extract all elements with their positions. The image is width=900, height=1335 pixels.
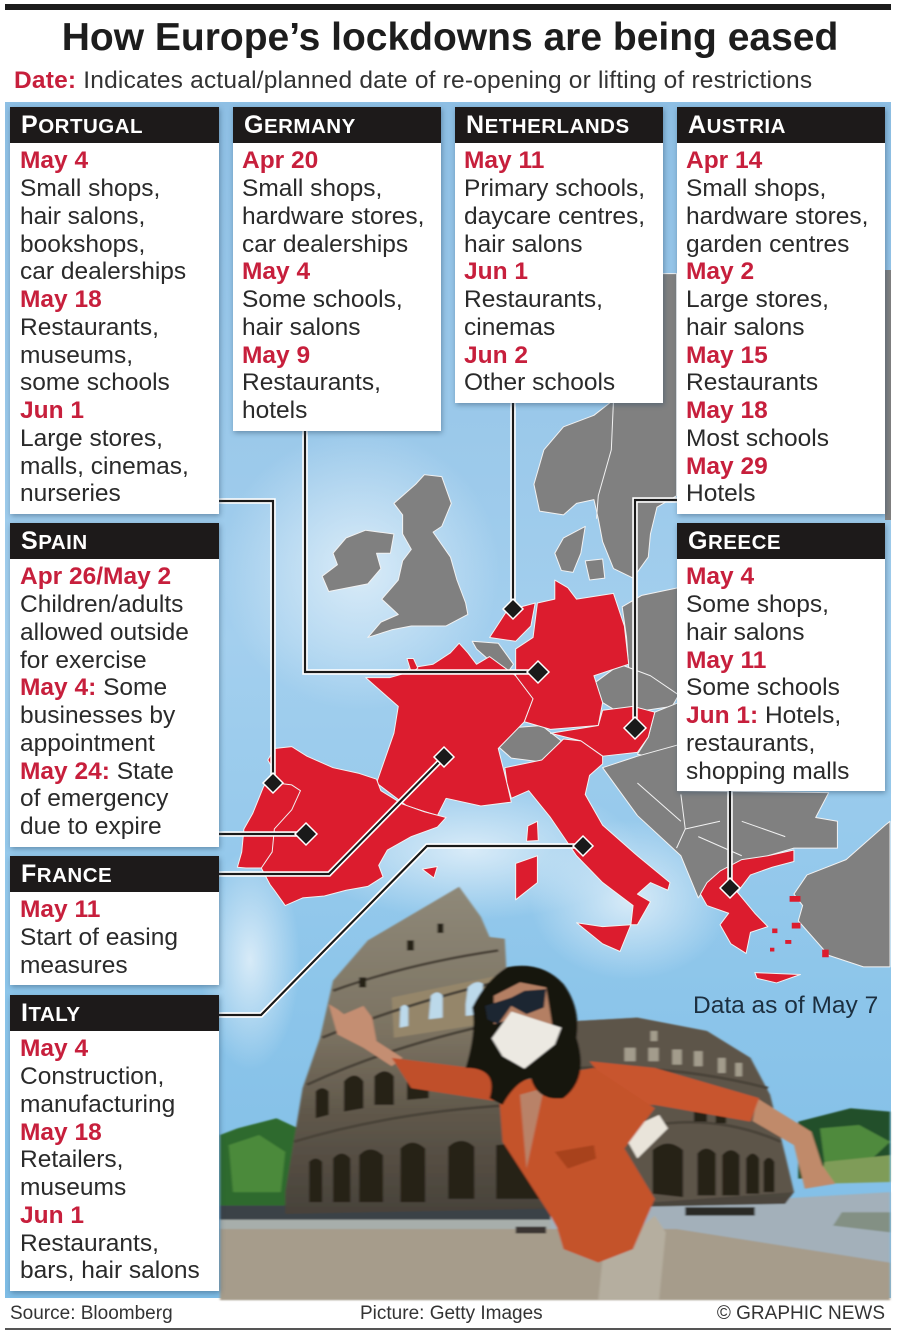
panel: Portugal [10, 107, 219, 514]
picture credit: Picture: Getty Images [360, 1303, 543, 1324]
plaza ground [220, 1192, 890, 1300]
heading: Austria: AUSTRIA [688, 111, 786, 139]
heading: Netherlands [455, 107, 663, 143]
text: Portugal dates: Large stores, [20, 425, 163, 452]
text: Italy dates: Construction, [20, 1063, 164, 1090]
text: France dates [20, 896, 178, 979]
text: Portugal dates: malls, cinemas, [20, 453, 189, 480]
text: Greece dates: Jun 1: Hotels, [686, 702, 841, 729]
text: Portugal dates: Small shops, [20, 175, 160, 202]
text: Spain dates [20, 563, 189, 840]
text: Germany dates: Some schools, [242, 286, 403, 313]
text: Italy dates: bars, hair salons [20, 1257, 200, 1284]
pale upper windows [624, 1031, 742, 1076]
sunlit upper tier [392, 976, 503, 1038]
text: Austria dates: May 2 [686, 258, 754, 285]
text: Portugal dates: Jun 1 [20, 397, 84, 424]
text: Netherlands dates: cinemas [464, 314, 555, 341]
text: Germany dates: hardware stores, [242, 203, 424, 230]
text: Netherlands dates [464, 147, 645, 396]
text: Greece dates: shopping malls [686, 758, 849, 785]
text: Italy dates [20, 1035, 200, 1284]
text: Austria dates: garden centres [686, 231, 849, 258]
text: Austria dates: Restaurants [686, 369, 818, 396]
panel: Netherlands [455, 107, 663, 403]
text: Portugal dates: May 18 [20, 286, 102, 313]
text: Austria dates: Small shops, [686, 175, 826, 202]
text: Italy dates: Restaurants, [20, 1230, 159, 1257]
text: Netherlands dates: Primary schools, [464, 175, 645, 202]
map of Europe [237, 274, 890, 983]
top rule [5, 4, 891, 10]
text: Germany dates [242, 147, 424, 424]
text: Austria dates: Most schools [686, 425, 829, 452]
heading: Spain: SPAIN [21, 527, 88, 555]
text: Italy dates: Retailers, [20, 1146, 123, 1173]
text: Austria dates [686, 147, 868, 507]
heading: Greece: GREECE [688, 527, 781, 555]
text: Germany dates: Apr 20 [242, 147, 318, 174]
heading: Greece [677, 523, 885, 559]
arches [309, 924, 774, 1202]
heading: Italy: ITALY [21, 999, 81, 1027]
text: Germany dates: car dealerships [242, 231, 408, 258]
panel: Germany [233, 107, 441, 431]
panel: Greece [677, 523, 885, 791]
text: Italy dates: manufacturing [20, 1091, 175, 1118]
text: France dates: measures [20, 952, 128, 979]
heading: France [10, 856, 219, 892]
date key: Date: Indicates actual/planned date of re-opening or lifting of restrictions [14, 67, 812, 94]
text: Germany dates: May 4 [242, 258, 310, 285]
photo: Colosseum and masked woman [220, 887, 890, 1300]
text: Netherlands dates: hair salons [464, 231, 582, 258]
text: Netherlands dates: Jun 1 [464, 258, 528, 285]
panel: France [10, 856, 219, 985]
text: Netherlands dates: Other schools [464, 369, 615, 396]
cornices [294, 950, 781, 1142]
text: Greece dates: hair salons [686, 619, 804, 646]
text: Portugal dates: hair salons, [20, 203, 145, 230]
text: Portugal dates [20, 147, 189, 507]
text: Portugal dates: museums, [20, 342, 133, 369]
heading: Italy [10, 995, 219, 1031]
text: Austria dates: hair salons [686, 314, 804, 341]
text: Netherlands dates: May 11 [464, 147, 544, 174]
eased countries [237, 580, 829, 983]
text: Spain dates: May 4: Some [20, 674, 167, 701]
text: Germany dates: hair salons [242, 314, 360, 341]
text: Spain dates: for exercise [20, 647, 147, 674]
far-east landmass edge [885, 270, 891, 520]
heading: Portugal: PORTUGAL [21, 111, 143, 139]
copyright: © GRAPHIC NEWS [717, 1303, 885, 1324]
text: Germany dates: May 9 [242, 342, 310, 369]
text: Austria dates: Hotels [686, 480, 755, 507]
Colosseum [285, 887, 794, 1214]
text: Greece dates: Some shops, [686, 591, 829, 618]
text: Spain dates: allowed outside [20, 619, 189, 646]
text: Netherlands dates: Restaurants, [464, 286, 603, 313]
panel: Spain [10, 523, 219, 847]
text: Portugal dates: car dealerships [20, 258, 186, 285]
text: Netherlands dates: daycare centres, [464, 203, 645, 230]
text: Greece dates: May 4 [686, 563, 754, 590]
title: How Europe’s lockdowns are being eased [62, 16, 838, 59]
data note: Data as of May 7 [693, 992, 878, 1019]
heading: Spain [10, 523, 219, 559]
text: France dates: Start of easing [20, 924, 178, 951]
non-eased countries [322, 274, 890, 967]
text: Austria dates: hardware stores, [686, 203, 868, 230]
text: Austria dates: Large stores, [686, 286, 829, 313]
sky windows [400, 982, 483, 1028]
text: France dates: May 11 [20, 896, 100, 923]
text: Austria dates: May 15 [686, 342, 768, 369]
text: Austria dates: Apr 14 [686, 147, 762, 174]
text: Spain dates: May 24: State [20, 758, 174, 785]
text: Greece dates [686, 563, 849, 785]
text: Spain dates: businesses by [20, 702, 175, 729]
heading: Austria [677, 107, 885, 143]
woman [329, 966, 835, 1300]
text: Spain dates: of emergency [20, 785, 168, 812]
text: Spain dates: Apr 26/May 2 [20, 563, 171, 590]
heading: France: FRANCE [21, 860, 112, 888]
text: Portugal dates: bookshops, [20, 231, 145, 258]
text: Spain dates: appointment [20, 730, 155, 757]
source credit: Source: Bloomberg [10, 1303, 173, 1324]
text: Portugal dates: nurseries [20, 480, 121, 507]
text: Greece dates: Some schools [686, 674, 840, 701]
text: Italy dates: Jun 1 [20, 1202, 84, 1229]
location diamonds [263, 599, 740, 898]
heading: Portugal [10, 107, 219, 143]
panel: Italy [10, 995, 219, 1291]
text: Germany dates: Restaurants, [242, 369, 381, 396]
text: Germany dates: hotels [242, 397, 307, 424]
leader lines [219, 403, 730, 1015]
text: Portugal dates: some schools [20, 369, 170, 396]
trees [220, 1108, 890, 1206]
bottom rule [5, 1328, 891, 1330]
heading: Germany: GERMANY [244, 111, 356, 139]
text: Italy dates: May 18 [20, 1119, 102, 1146]
text: Austria dates: May 29 [686, 453, 768, 480]
text: Spain dates: due to expire [20, 813, 162, 840]
text: Portugal dates: May 4 [20, 147, 88, 174]
text: Portugal dates: Restaurants, [20, 314, 159, 341]
text: Italy dates: May 4 [20, 1035, 88, 1062]
text: Austria dates: May 18 [686, 397, 768, 424]
text: Netherlands dates: Jun 2 [464, 342, 528, 369]
text: Greece dates: restaurants, [686, 730, 815, 757]
heading: Germany [233, 107, 441, 143]
text: Italy dates: museums [20, 1174, 126, 1201]
heading: Netherlands: NETHERLANDS [466, 111, 630, 139]
text: Spain dates: Children/adults [20, 591, 183, 618]
plinth [685, 1207, 755, 1216]
text: Germany dates: Small shops, [242, 175, 382, 202]
panel: Austria [677, 107, 885, 514]
text: Greece dates: May 11 [686, 647, 766, 674]
